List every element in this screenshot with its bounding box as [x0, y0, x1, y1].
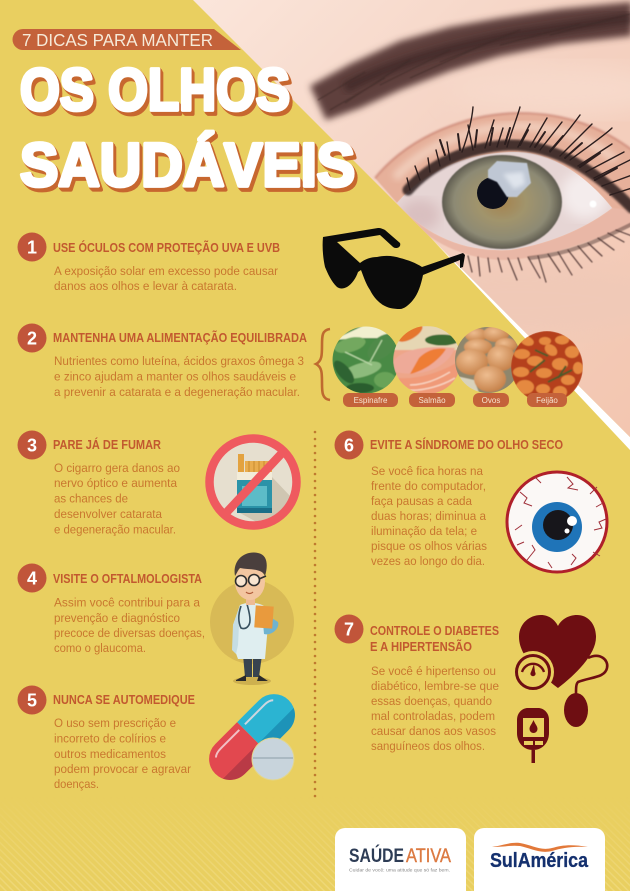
lower eyelashes [468, 224, 630, 282]
number badge 5 [18, 686, 46, 714]
text 6: pisque os olhos várias [371, 539, 487, 553]
text 5: O uso sem prescrição e [54, 716, 176, 730]
text 6: frente do computador, [371, 479, 486, 493]
number badge 2: 2 [27, 328, 37, 348]
heading 6: EVITE A SÍNDROME DO OLHO SECO [370, 437, 563, 452]
white diagonal strip [430, 237, 630, 450]
heading 4: VISITE O OFTALMOLOGISTA [53, 572, 202, 586]
heading 7: CONTROLE O DIABETES [370, 624, 499, 638]
number badge 6 [334, 430, 364, 460]
icon: bloodshot eye [507, 472, 607, 572]
number badge 3: 3 [27, 436, 37, 456]
text 6: iluminação da tela; e [371, 524, 477, 538]
text 7: causar danos aos vasos [371, 724, 496, 738]
logo card: SulAmérica [474, 828, 605, 891]
text 3 [54, 461, 180, 536]
tip 6 [334, 430, 607, 572]
text 4: prevenção e diagnóstico [54, 611, 180, 625]
brace [316, 329, 330, 400]
text 6: duas horas; diminua a [371, 509, 486, 523]
heading 1: USE ÓCULOS COM PROTEÇÃO UVA E UVB [53, 240, 280, 255]
text 7: diabético, lembre-se que [371, 679, 499, 693]
food: spinach [332, 326, 396, 393]
text 7 [371, 664, 499, 753]
number badge 1: 1 [27, 238, 37, 258]
number badge 6: 6 [344, 436, 354, 456]
text 2: a prevenir a catarata e a degeneração macular. [54, 385, 300, 399]
text 4 [54, 596, 205, 655]
number badge 5: 5 [27, 690, 37, 710]
text 2: e zinco ajudam a manter os olhos saudáveis e [54, 370, 296, 384]
text 3: desenvolver catarata [54, 507, 162, 521]
text 6: Se você fica horas na [371, 464, 483, 478]
food: eggs [455, 327, 518, 393]
number badge 7: 7 [344, 620, 354, 640]
text 3: e degeneração macular. [54, 522, 176, 536]
text 6: faça pausas a cada [371, 494, 472, 508]
logo card: Saúde Ativa: Cuidar de você: uma atitude que só faz bem. [349, 868, 450, 872]
text 5: doenças. [54, 777, 99, 791]
text 4: precoce de diversas doenças, [54, 626, 205, 640]
tip 4 [18, 552, 294, 685]
heading 7 [370, 624, 499, 654]
logo card: Saúde Ativa: ATIVA [406, 845, 451, 867]
logo card: Saúde Ativa [335, 828, 466, 891]
eyelid shadow [375, 113, 630, 220]
tip 7 [334, 614, 607, 763]
text 5: incorreto de colírios e [54, 732, 166, 746]
number badge 7 [334, 614, 364, 644]
text 2 [54, 354, 304, 399]
text 7: Se você é hipertenso ou [371, 664, 496, 678]
text 4: Assim você contribui para a [54, 596, 200, 610]
food: beans [511, 331, 583, 403]
logo card: Saúde Ativa: SAÚDE [349, 843, 404, 867]
title: OS OLHOS [20, 57, 290, 123]
food: salmon [393, 326, 458, 393]
number badge 2 [18, 324, 46, 352]
text 1: danos aos olhos e levar à catarata. [54, 279, 237, 293]
logo card: SulAmérica: SulAmérica [490, 850, 589, 872]
number badge 1 [18, 232, 46, 262]
tip 3 [18, 430, 297, 536]
eyeball [397, 152, 612, 250]
icon: no smoking [209, 438, 297, 526]
text 5: podem provocar e agravar [54, 762, 191, 776]
icon: pills [200, 685, 304, 789]
tip 2 [18, 321, 583, 407]
banner: 7 dicas para manter: 7 DICAS PARA MANTER [22, 30, 213, 50]
tip 1 [18, 228, 465, 309]
text 5 [54, 716, 191, 791]
text 5: outros medicamentos [54, 747, 166, 761]
photo: close-up of an eye [190, 0, 630, 440]
heading 5: NUNCA SE AUTOMEDIQUE [53, 693, 195, 707]
text 6: vezes ao longo do dia. [371, 554, 485, 568]
text 3: nervo óptico e aumenta [54, 476, 177, 490]
number badge 3 [18, 430, 46, 460]
text 3: as chances de [54, 492, 128, 506]
title [20, 57, 355, 199]
dotted divider [314, 432, 316, 797]
title: SAUDÁVEIS [20, 131, 355, 199]
heading 7: E A HIPERTENSÃO [370, 639, 472, 654]
icon: doctor [210, 552, 294, 685]
upper eyelashes [407, 107, 630, 208]
text 1: A exposição solar em excesso pode causar [54, 264, 278, 278]
text 7: essas doenças, quando [371, 694, 492, 708]
text 4: como o glaucoma. [54, 641, 146, 655]
bottom stripe pattern [0, 827, 630, 891]
food labels: Ovos [482, 396, 500, 405]
number badge 4: 4 [27, 568, 37, 588]
eyebrow [310, 2, 630, 120]
text 7: mal controladas, podem [371, 709, 495, 723]
food labels: Feijão [536, 396, 558, 405]
tip 5 [18, 685, 304, 791]
text 3: O cigarro gera danos ao [54, 461, 180, 475]
text 1 [54, 264, 278, 293]
food labels [343, 393, 567, 407]
icon: sunglasses [323, 228, 465, 309]
icon: blood pressure and glucose meter [512, 615, 607, 763]
heading 2: MANTENHA UMA ALIMENTAÇÃO EQUILIBRADA [53, 330, 307, 345]
text 2: Nutrientes como luteína, ácidos graxos ômega 3 [54, 354, 304, 368]
food labels: Espinafre [354, 396, 388, 405]
text 7: sanguíneos dos olhos. [371, 739, 485, 753]
number badge 4 [18, 564, 46, 592]
lower lid [397, 203, 630, 260]
text 6 [371, 464, 487, 568]
food labels: Salmão [418, 396, 446, 405]
heading 3: PARE JÁ DE FUMAR [53, 437, 161, 452]
